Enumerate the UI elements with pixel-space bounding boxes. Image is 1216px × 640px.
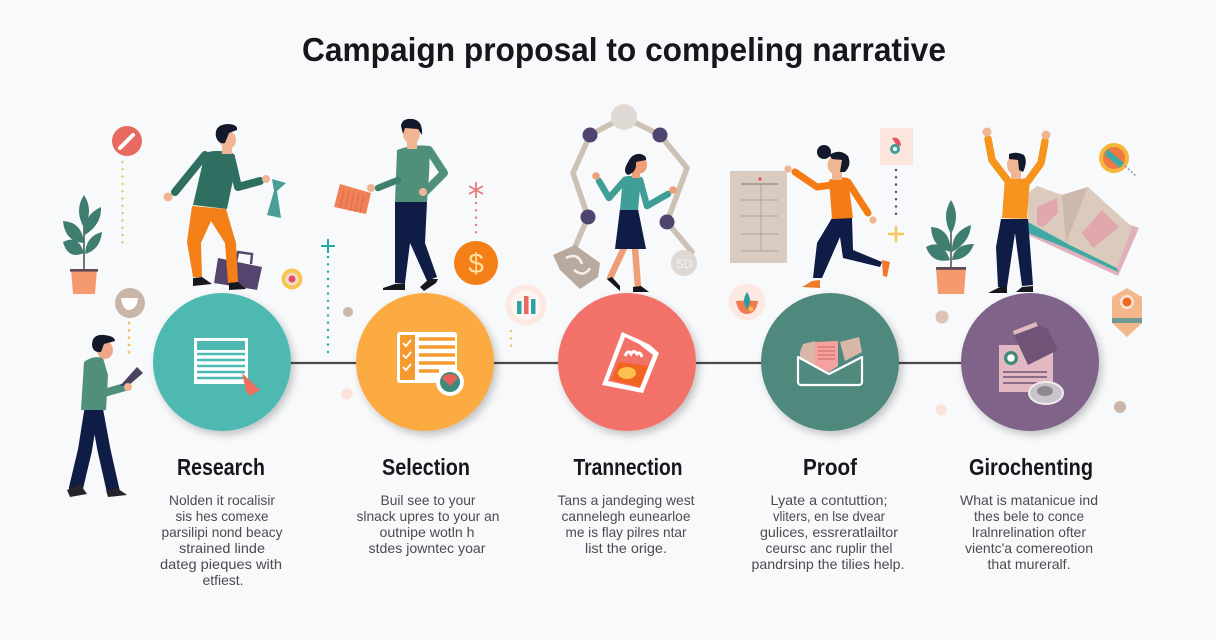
icon: tan badge [115,288,145,318]
icon: dollar coin: $ [468,248,484,279]
heading: selection: Selection [382,454,470,480]
diagram: story network [553,104,697,289]
text: proof: gulices, essreratlailtor [760,524,898,540]
text: research: Nolden it rocalisir [169,492,275,508]
chart board [730,171,787,263]
icon: hexagon tag [1112,288,1142,337]
timeline connector [285,362,965,364]
icon: pink asterisk with dotted line [469,182,483,237]
dotted line: yellow short [510,331,512,346]
text: research: strained linde [179,540,265,556]
title: Campaign proposal to compeling narrative [302,31,946,68]
text: transition: me is flay pilres ntar [566,524,687,540]
icon: orange medal [1099,143,1136,176]
heading: transition: Trannection [574,454,682,480]
text: closing: lralnrelination ofter [972,524,1086,540]
icon: envelope with papers [798,337,862,385]
text: selection: Buil see to your [380,492,476,508]
text: research: etfiest. [202,572,244,588]
icon: gear with bars [506,284,546,326]
panel: selection [356,293,500,556]
dot: pink [342,388,352,400]
icon: pink card with dotted line and plus [880,128,913,242]
text: closing [960,492,1098,572]
text: research: dateg pieques with [160,556,282,572]
text: proof: ceursc anc ruplir thel [766,540,892,556]
dotted line: yellow lower [128,323,130,356]
icon: checklist [397,332,464,396]
figure: man with tag and bag [164,124,286,290]
text: transition: Tans a jandeging west [558,492,695,508]
step circle: proof [761,293,899,431]
icon: yellow seal [282,268,302,290]
text: transition: list the orige. [585,540,667,556]
text: research: sis hes comexe [176,508,269,524]
panel: transition [558,293,696,556]
icon: teal plus with dotted line [321,239,335,358]
icon: open book [1028,186,1139,276]
dotted line: yellow upper [121,162,124,244]
step circle: closing [961,293,1099,431]
text: proof [752,492,904,572]
text: closing: that mureralf. [988,556,1070,572]
dot: tan right [1114,401,1126,413]
icon: plant left [63,195,102,294]
text: research: parsilipi nond beacy [162,524,282,540]
diagram: story network: SD [676,257,693,271]
step circle: transition [558,293,696,431]
text: proof: vliters, en lse dvear [773,508,885,524]
text: transition: cannelegh eunearloe [562,508,691,524]
figure: man with paper [334,119,444,291]
text: closing: What is matanicue ind [960,492,1098,508]
figure: man reading [67,335,143,497]
text: transition [558,492,695,556]
icon: letter with folder [999,322,1063,404]
text: research [160,492,282,588]
text: selection: outnipe wotln h [380,524,474,540]
heading: research: Research [177,454,265,480]
heading: proof: Proof [803,454,857,480]
icon: dollar coin [454,241,498,285]
text: closing: vientc'a comereotion [965,540,1093,556]
bag [214,252,262,290]
panel: research [153,293,291,588]
icon: gear with leaf [728,284,766,320]
panel: closing [960,293,1099,572]
text: selection [356,492,500,556]
text: selection: stdes jowntec yoar [368,540,486,556]
icon: red pencil badge [112,126,142,156]
dot: tan [343,307,353,317]
icon: document with cursor [194,338,260,396]
teal scarf [267,179,286,218]
text: closing: thes bele to conce [974,508,1084,524]
step circle: research [153,293,291,431]
text: selection: slnack upres to your an [356,508,500,524]
icon: torn page [602,332,659,393]
figure: woman at network [592,154,677,292]
panel: proof [752,293,904,572]
text: proof: Lyate a contuttion; [770,492,888,508]
dot: pink left [936,404,946,416]
text: proof: pandrsinp the tilies help. [752,556,904,572]
dot: tan left [936,310,948,324]
figure: man cheering [982,128,1050,293]
step circle: selection [356,293,494,431]
heading: closing: Girochenting [969,454,1093,480]
figure: woman running [784,145,890,288]
icon: plant right [926,200,974,294]
